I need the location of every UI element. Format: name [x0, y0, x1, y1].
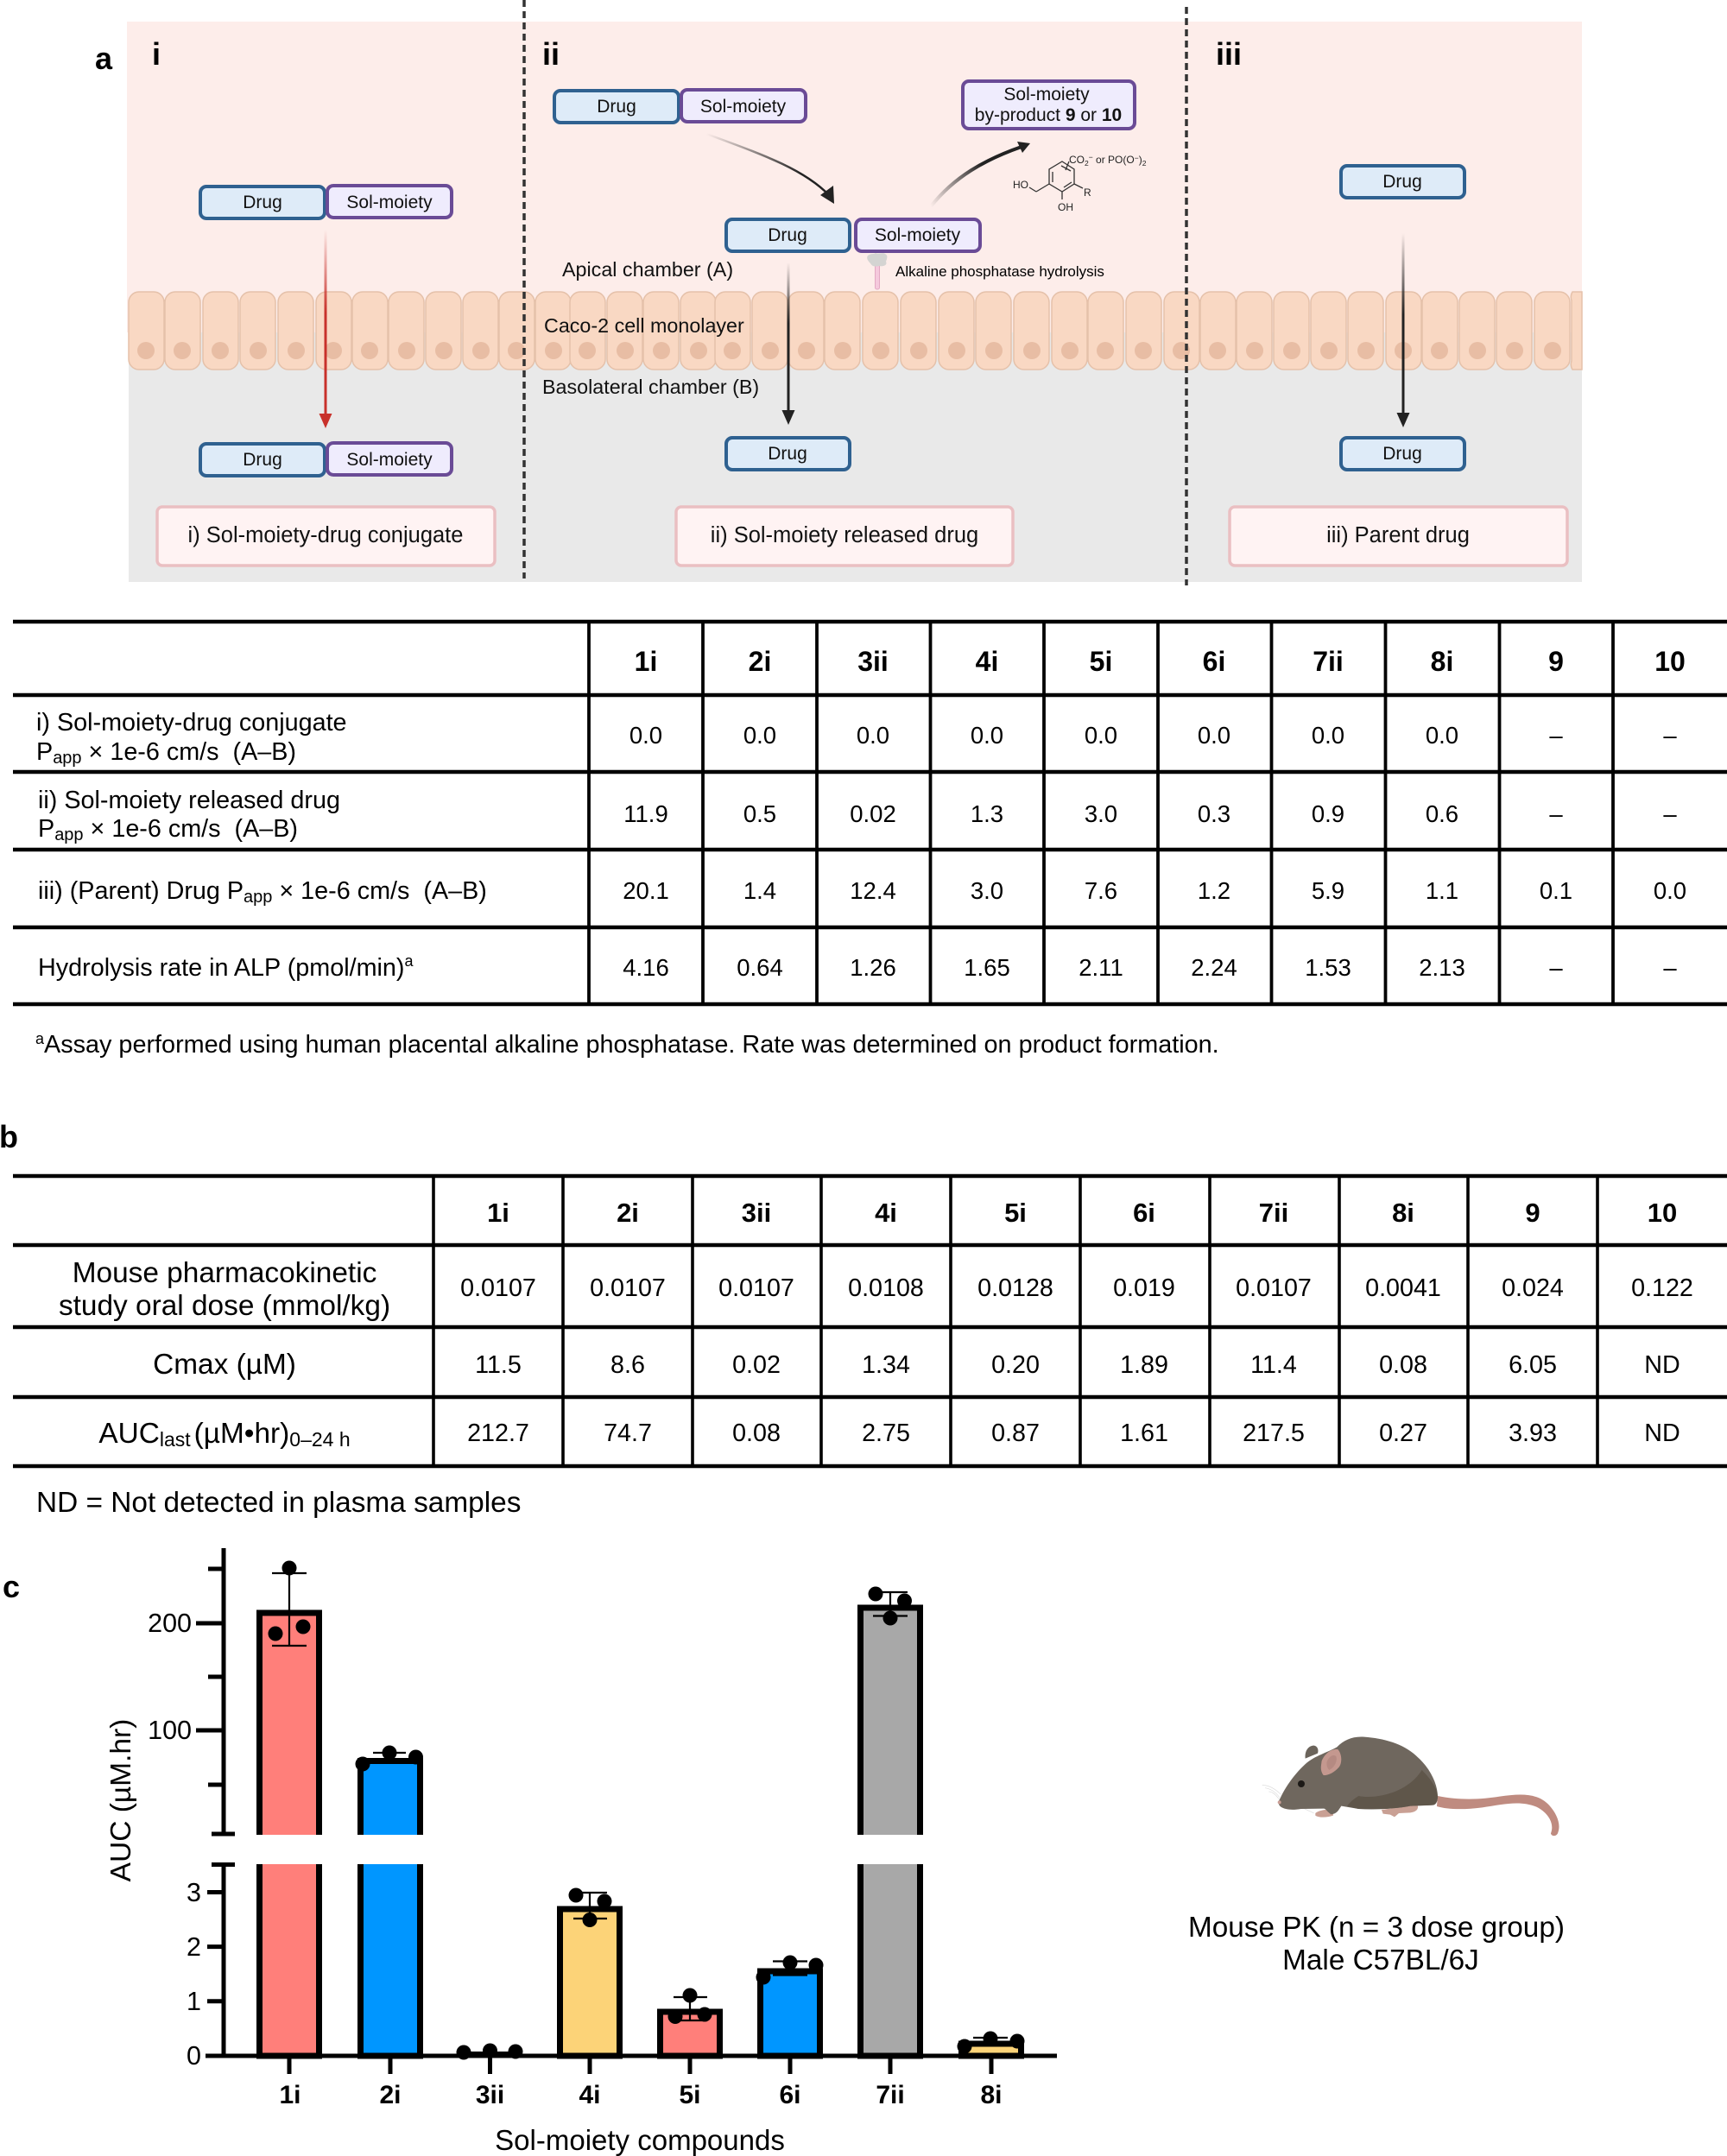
table header row: 10	[1648, 1198, 1677, 1228]
released drug conjugate top: Drug	[597, 97, 636, 117]
row: oral dose: 0.0107	[590, 1274, 666, 1302]
table header row: 7ii	[1313, 646, 1344, 677]
row: conjugate Papp: 0.0	[1198, 722, 1230, 749]
row: conjugate Papp: 0.0	[971, 722, 1003, 749]
row: conjugate Papp	[36, 709, 1677, 768]
caption i: i) Sol-moiety-drug conjugate	[188, 523, 463, 547]
mouse PK caption: Mouse PK (n = 3 dose group)	[1188, 1912, 1565, 1944]
by-product box	[963, 81, 1135, 129]
row: parent drug Papp: 3.0	[971, 877, 1003, 904]
black arrow iii	[1397, 233, 1409, 427]
bar 4i	[560, 1909, 620, 2056]
bar 5i	[660, 2012, 720, 2056]
row: released drug Papp: app	[54, 825, 84, 844]
row: released drug Papp: –	[1663, 800, 1677, 827]
row: parent drug Papp	[38, 877, 1686, 907]
row: AUC: ND	[1644, 1419, 1680, 1447]
x tick labels: 4i	[579, 2081, 601, 2109]
row: hydrolysis rate: 0.64	[737, 954, 783, 981]
row: released drug Papp: P	[38, 815, 54, 843]
table header row: 6i	[1133, 1198, 1155, 1228]
row: hydrolysis rate: 1.65	[964, 954, 1010, 981]
row: released drug Papp: × 1e-6 cm/s (A–B)	[84, 815, 298, 843]
table header row: 9	[1548, 646, 1564, 677]
table header row: 4i	[875, 1198, 897, 1228]
row: AUC: (µM•hr)	[194, 1418, 289, 1450]
conjugate top	[200, 186, 452, 218]
row: Cmax: 0.02	[732, 1351, 781, 1379]
row: hydrolysis rate: 1.53	[1305, 954, 1351, 981]
row: oral dose: study oral dose (mmol/kg)	[59, 1290, 390, 1322]
row: parent drug Papp: 1.1	[1426, 877, 1458, 904]
chemical structure: 2	[1142, 159, 1147, 168]
row: oral dose: 0.0107	[460, 1274, 536, 1302]
y tick labels: 1	[187, 1987, 201, 2016]
row: conjugate Papp: × 1e-6 cm/s (A–B)	[82, 738, 296, 766]
bar 6i	[760, 1971, 820, 2056]
row: AUC: AUC	[98, 1418, 160, 1450]
row: Cmax: ND	[1644, 1351, 1680, 1379]
row: Cmax: 11.4	[1250, 1351, 1297, 1379]
cell monolayer	[129, 292, 1582, 370]
parent drug bottom: Drug	[1382, 444, 1422, 464]
x tick labels: 7ii	[876, 2081, 905, 2109]
row: conjugate Papp: 0.0	[743, 722, 776, 749]
label: alkaline phosphatase hydrolysis: Alkaline phosphatase hydrolysis	[895, 263, 1104, 280]
row: hydrolysis rate: Hydrolysis rate in ALP (pmol/min)	[38, 954, 404, 982]
x tick labels: 8i	[980, 2081, 1003, 2109]
y tick labels: 3	[187, 1878, 201, 1907]
released drug bottom: Drug	[768, 444, 807, 464]
chemical structure: 2	[1085, 159, 1089, 168]
row: conjugate Papp: i) Sol-moiety-drug conjugate	[36, 709, 347, 737]
table header row: 5i	[1004, 1198, 1027, 1228]
row: oral dose: 0.0128	[977, 1274, 1053, 1302]
row: oral dose: 0.0041	[1365, 1274, 1441, 1302]
y axis	[196, 1548, 235, 2056]
conjugate bottom: Sol-moiety	[346, 450, 433, 470]
caption ii	[676, 507, 1013, 566]
table header row: 4i	[976, 646, 998, 677]
row: oral dose: 0.0108	[848, 1274, 924, 1302]
row: Cmax: 6.05	[1509, 1351, 1557, 1379]
row: oral dose: 0.0107	[1236, 1274, 1312, 1302]
bar 2i	[361, 1761, 420, 2056]
x tick labels: 3ii	[476, 2081, 504, 2109]
chemical structure: or PO(O	[1093, 154, 1135, 166]
dashed divider left	[522, 0, 526, 579]
row: released drug Papp: 0.3	[1198, 800, 1230, 827]
row: parent drug Papp: 5.9	[1312, 877, 1344, 904]
row: AUC: 0.27	[1379, 1419, 1427, 1447]
row: released drug Papp: 11.9	[623, 800, 668, 827]
row: AUC: 212.7	[467, 1419, 529, 1447]
row: Cmax: 1.89	[1120, 1351, 1168, 1379]
row: Cmax: Cmax (µM)	[153, 1349, 296, 1381]
black arrow ii	[782, 262, 794, 425]
label: basolateral chamber: Basolateral chamber (B)	[542, 376, 759, 398]
chemical structure: )	[1139, 154, 1142, 166]
table header row: 2i	[617, 1198, 639, 1228]
row: AUC: 74.7	[604, 1419, 652, 1447]
row: hydrolysis rate: 1.26	[850, 954, 896, 981]
table header row: 7ii	[1259, 1198, 1288, 1228]
released drug conjugate top: Sol-moiety	[700, 97, 787, 117]
row: conjugate Papp: 0.0	[857, 722, 889, 749]
row: hydrolysis rate: 2.24	[1191, 954, 1237, 981]
mouse PK caption	[1188, 1912, 1565, 1976]
row: parent drug Papp: 0.0	[1654, 877, 1686, 904]
row: conjugate Papp: app	[53, 749, 82, 768]
panel: a transport schematic	[95, 0, 1582, 585]
bar 8i	[962, 2044, 1021, 2056]
row: hydrolysis rate: 4.16	[623, 954, 669, 981]
by-product box: Sol-moiety	[1003, 85, 1090, 104]
row: AUC: 3.93	[1509, 1419, 1557, 1447]
row: parent drug Papp: iii) (Parent) Drug P	[38, 877, 244, 905]
row: AUC: 0–24 h	[289, 1428, 351, 1451]
row: parent drug Papp: × 1e-6 cm/s (A–B)	[272, 877, 487, 905]
column tag iii: iii	[1216, 36, 1242, 72]
caption i	[157, 507, 495, 566]
row: Cmax: 11.5	[475, 1351, 522, 1379]
y tick labels: 0	[187, 2041, 201, 2071]
row: AUC: 0.87	[991, 1419, 1040, 1447]
table header row: 10	[1654, 646, 1686, 677]
dashed divider right	[1185, 7, 1188, 585]
y tick labels: 2	[187, 1932, 201, 1962]
row: AUC: last	[160, 1428, 191, 1451]
conjugate top: Drug	[243, 193, 282, 212]
row: oral dose: 0.019	[1113, 1274, 1175, 1302]
row: AUC: 2.75	[862, 1419, 910, 1447]
x tick labels: 6i	[779, 2081, 801, 2109]
chemical structure: OH	[1058, 201, 1073, 213]
table header row: 2i	[749, 646, 771, 677]
caption ii: ii) Sol-moiety released drug	[711, 523, 978, 547]
row: parent drug Papp: 12.4	[850, 877, 896, 904]
column tag i: i	[152, 36, 161, 72]
caption iii: iii) Parent drug	[1326, 523, 1470, 547]
row: AUC: 1.61	[1120, 1419, 1168, 1447]
column tag ii: ii	[542, 36, 560, 72]
row: oral dose: Mouse pharmacokinetic	[73, 1257, 376, 1289]
parent drug bottom	[1341, 438, 1464, 470]
row: released drug Papp: 0.5	[743, 800, 776, 827]
y tick labels	[148, 1609, 201, 2071]
row: AUC: 217.5	[1243, 1419, 1305, 1447]
bar 7ii	[860, 1608, 920, 2056]
bar 1i	[259, 1613, 319, 2056]
basolateral chamber background	[129, 332, 1582, 582]
row: parent drug Papp: 7.6	[1085, 877, 1117, 904]
row: parent drug Papp: 1.2	[1198, 877, 1230, 904]
mouse PK caption: Male C57BL/6J	[1282, 1944, 1479, 1976]
panel letter c: c	[3, 1569, 20, 1604]
row: released drug Papp: 0.6	[1426, 800, 1458, 827]
conjugate at membrane: Drug	[768, 225, 807, 245]
panel letter a: a	[95, 41, 113, 76]
conjugate top: Sol-moiety	[346, 193, 433, 212]
parent drug top	[1341, 166, 1464, 198]
chemical structure: −	[1089, 153, 1093, 161]
apical chamber background	[127, 22, 1582, 332]
x tick labels	[279, 2081, 1003, 2109]
conjugate at membrane	[726, 219, 980, 251]
row: Cmax: 0.08	[1379, 1351, 1427, 1379]
table header row: 1i	[635, 646, 657, 677]
y tick labels: 100	[148, 1716, 192, 1745]
caption iii	[1230, 507, 1567, 566]
note: ND definition: ND = Not detected in plasma samples	[36, 1487, 521, 1519]
row: released drug Papp: 1.3	[971, 800, 1003, 827]
row: released drug Papp: 0.02	[850, 800, 896, 827]
conjugate bottom	[200, 443, 452, 476]
table header row: 3ii	[857, 646, 889, 677]
table header row: 3ii	[742, 1198, 771, 1228]
icon: alkaline phosphatase enzyme	[867, 253, 887, 289]
label: Caco-2 monolayer: Caco-2 cell monolayer	[544, 314, 744, 337]
row: AUC: 0.08	[732, 1419, 781, 1447]
table header row: 5i	[1090, 646, 1112, 677]
row: hydrolysis rate: –	[1549, 954, 1563, 981]
row: released drug Papp	[38, 787, 1677, 844]
x tick labels: 5i	[679, 2081, 701, 2109]
table footnote: a	[35, 1030, 45, 1047]
row: conjugate Papp: –	[1663, 722, 1677, 749]
row: released drug Papp: –	[1549, 800, 1563, 827]
by-product box: by-product 9 or 10	[975, 105, 1122, 125]
chemical structure: R	[1084, 187, 1091, 199]
row: conjugate Papp: P	[36, 738, 53, 766]
released drug bottom	[726, 438, 850, 470]
conjugate at membrane: Sol-moiety	[875, 225, 961, 245]
row: conjugate Papp: 0.0	[1426, 722, 1458, 749]
row: Cmax: 0.20	[991, 1351, 1040, 1379]
conjugate bottom: Drug	[243, 450, 282, 470]
row: released drug Papp: 0.9	[1312, 800, 1344, 827]
row: conjugate Papp: 0.0	[1085, 722, 1117, 749]
row: released drug Papp: 3.0	[1085, 800, 1117, 827]
row: oral dose	[59, 1257, 1693, 1322]
row: conjugate Papp: –	[1549, 722, 1563, 749]
row: oral dose: 0.122	[1631, 1274, 1693, 1302]
row: hydrolysis rate: 2.13	[1419, 954, 1465, 981]
curved arrow out	[931, 142, 1030, 206]
label: apical chamber: Apical chamber (A)	[562, 258, 733, 281]
row: parent drug Papp: app	[244, 888, 272, 907]
table header row: 8i	[1392, 1198, 1414, 1228]
chemical structure: HO	[1013, 179, 1028, 191]
x tick labels: 1i	[279, 2081, 301, 2109]
table header row	[487, 1198, 1677, 1228]
row: AUC	[98, 1418, 1680, 1451]
table header row: 6i	[1203, 646, 1225, 677]
table: mouse pharmacokinetics	[13, 1176, 1727, 1466]
chemical structure	[1013, 153, 1147, 213]
row: Cmax: 1.34	[862, 1351, 910, 1379]
curved arrow in	[706, 134, 834, 204]
x axis	[206, 2056, 1057, 2074]
table header row	[635, 646, 1686, 677]
table header row: 1i	[487, 1198, 509, 1228]
row: Cmax: 8.6	[610, 1351, 645, 1379]
row: parent drug Papp: 1.4	[743, 877, 776, 904]
row: conjugate Papp: 0.0	[629, 722, 662, 749]
error bars and data points	[268, 1561, 1024, 2060]
icon: mouse	[1262, 1737, 1559, 1836]
row: hydrolysis rate: –	[1663, 954, 1677, 981]
row: Cmax	[153, 1349, 1680, 1381]
red arrow	[319, 230, 332, 428]
table footnote: Assay performed using human placental alkaline phosphatase. Rate was determined on product formation.	[44, 1031, 1219, 1059]
row: parent drug Papp: 20.1	[623, 877, 669, 904]
row: hydrolysis rate: 2.11	[1079, 954, 1123, 981]
released drug conjugate top	[554, 90, 806, 123]
table: permeability and hydrolysis	[13, 622, 1727, 1004]
row: parent drug Papp: 0.1	[1540, 877, 1572, 904]
chemical structure: CO	[1069, 154, 1085, 166]
table header row: 8i	[1431, 646, 1453, 677]
x tick labels: 2i	[379, 2081, 402, 2109]
y axis title: AUC (µM.hr)	[105, 1719, 137, 1881]
bar chart: AUC of sol-moiety compounds	[105, 1548, 1057, 2156]
row: oral dose: 0.024	[1502, 1274, 1564, 1302]
row: oral dose: 0.0107	[718, 1274, 794, 1302]
row: hydrolysis rate: a	[404, 952, 414, 970]
chemical structure: −	[1135, 154, 1139, 162]
bar 3ii	[460, 2052, 520, 2056]
parent drug top: Drug	[1382, 172, 1422, 192]
row: released drug Papp: ii) Sol-moiety released drug	[38, 787, 340, 814]
y tick labels: 200	[148, 1609, 192, 1638]
table header row: 9	[1525, 1198, 1540, 1228]
row: hydrolysis rate	[38, 952, 1677, 982]
row: conjugate Papp: 0.0	[1312, 722, 1344, 749]
x axis title: Sol-moiety compounds	[495, 2124, 785, 2156]
